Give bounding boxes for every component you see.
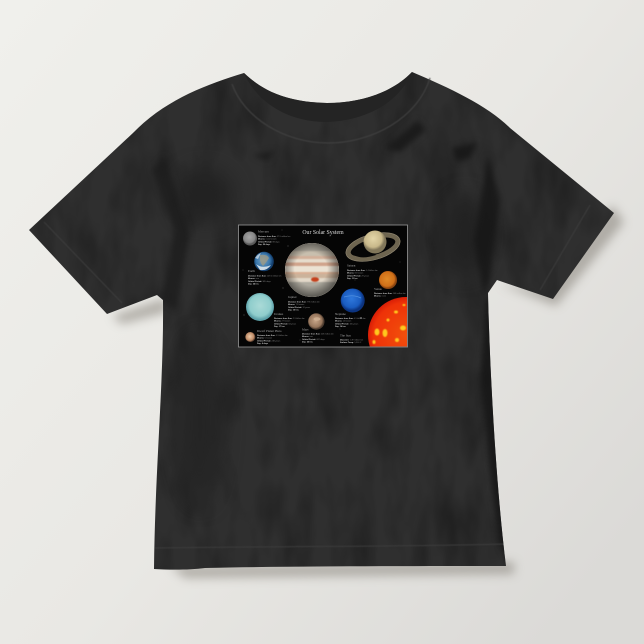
label: Venus: Distance from Sun: 108 million km	[374, 292, 406, 295]
label: The Sun: The Sun	[340, 334, 351, 338]
label: Jupiter: Day: 10 hrs	[288, 310, 300, 312]
planet: Venus	[379, 271, 397, 289]
label: Jupiter: Jupiter	[288, 295, 298, 299]
label: Uranus: Moons: 27 known	[274, 321, 290, 323]
label: Neptune: Distance from Sun: 4.5 billion km	[335, 317, 366, 320]
label: The Sun	[340, 334, 363, 344]
label: Neptune: Orbital Period: 165 years	[335, 322, 358, 325]
label: Jupiter	[288, 295, 320, 312]
poster title: Our Solar System	[302, 230, 344, 236]
label: Uranus: Distance from Sun: 2.9 billion km	[274, 317, 305, 320]
label: Neptune: Moons: 14 known	[335, 321, 351, 323]
label: Pluto: Day: 6 days	[257, 343, 269, 345]
label: Mercury: Moons: none known	[258, 239, 276, 241]
label: Mercury	[258, 230, 291, 246]
label: Pluto: Moons: 5 known	[257, 338, 272, 340]
label: Mercury: Distance from Sun: 57.9 million km	[258, 235, 291, 238]
label: Saturn: Day: 11 hrs	[347, 278, 359, 280]
planet: Pluto	[245, 332, 255, 342]
planet: Earth	[254, 252, 274, 271]
sleeve hem stitching	[44, 205, 590, 548]
planet: Saturn	[346, 230, 400, 262]
label: Earth: Distance from Sun: 149.6 million km	[248, 274, 282, 278]
label: The Sun: Diameter: 1.39 million km	[340, 338, 363, 342]
label: Pluto: Orbital Period: 248 years	[257, 339, 280, 342]
label: Pluto: Dwarf Planet Pluto	[257, 329, 282, 333]
label: Jupiter: Orbital Period: 12 years	[288, 306, 310, 309]
label: Mars	[302, 328, 334, 344]
label: Mars: Moons: two	[302, 335, 314, 338]
label: Mercury: Mercury	[258, 230, 269, 234]
label: Mars: Distance from Sun: 228 million km	[302, 332, 334, 336]
label: Pluto	[257, 329, 288, 345]
t-shirt drop shadow	[112, 205, 624, 578]
planet: Jupiter	[284, 242, 340, 298]
label: Saturn: Orbital Period: 29 years	[347, 274, 369, 277]
label: Mars: Day: 25 hrs	[302, 342, 314, 344]
label: Saturn: Distance from Sun: 1.4 billion km	[347, 269, 378, 272]
label: Earth	[248, 269, 282, 286]
shirt body silhouette	[29, 72, 614, 570]
label: Jupiter: Distance from Sun: 778 million km	[288, 300, 320, 304]
label: Neptune: Neptune	[335, 312, 346, 316]
label: Pluto: Distance from Sun: 5.9 billion km	[257, 334, 288, 337]
label: Uranus: Uranus	[274, 312, 284, 316]
label: Neptune: Day: 16 hrs	[335, 326, 347, 328]
label: Uranus: Orbital Period: 84 years	[274, 322, 296, 325]
label: Mercury: Orbital Period: 88 days	[258, 240, 279, 243]
label: Uranus: Day: 17 hrs	[274, 326, 286, 328]
label: Jupiter: Moons: 79 known	[288, 304, 304, 306]
planet: Mars	[308, 313, 324, 330]
the Sun	[368, 297, 407, 346]
label: Earth: Moons: one	[248, 278, 260, 280]
planet: Mercury	[243, 232, 257, 246]
label: Saturn	[347, 264, 378, 280]
poster background	[238, 225, 408, 347]
collar ribbing seam	[232, 78, 430, 143]
label: The Sun: Surface Temp: 5,500 C	[340, 342, 362, 344]
label: Saturn: Saturn	[347, 264, 356, 268]
fabric folds and shading	[41, 72, 576, 570]
label: Saturn: Moons: 82 known	[347, 273, 363, 275]
label: Uranus	[274, 312, 305, 328]
planet: Uranus	[246, 293, 274, 321]
label: Earth: Earth	[248, 269, 255, 273]
planet: Neptune	[341, 288, 365, 312]
label: Mars: Mars	[302, 328, 309, 332]
label: Venus: Venus	[374, 287, 383, 291]
printed solar system poster	[238, 224, 408, 348]
t-shirt	[29, 72, 614, 570]
label: Venus	[374, 287, 406, 298]
back neck inner	[244, 72, 412, 122]
star field	[243, 230, 400, 340]
label: Earth: Day: 24 hrs	[248, 283, 260, 286]
label: Mars: Orbital Period: 687 days	[302, 338, 325, 341]
label: Mercury: Day: 59 days	[258, 244, 271, 246]
label: Neptune	[335, 312, 366, 328]
label: Earth: Orbital Period: 365 days	[248, 280, 271, 283]
label: Venus: Moons: none	[374, 296, 387, 298]
